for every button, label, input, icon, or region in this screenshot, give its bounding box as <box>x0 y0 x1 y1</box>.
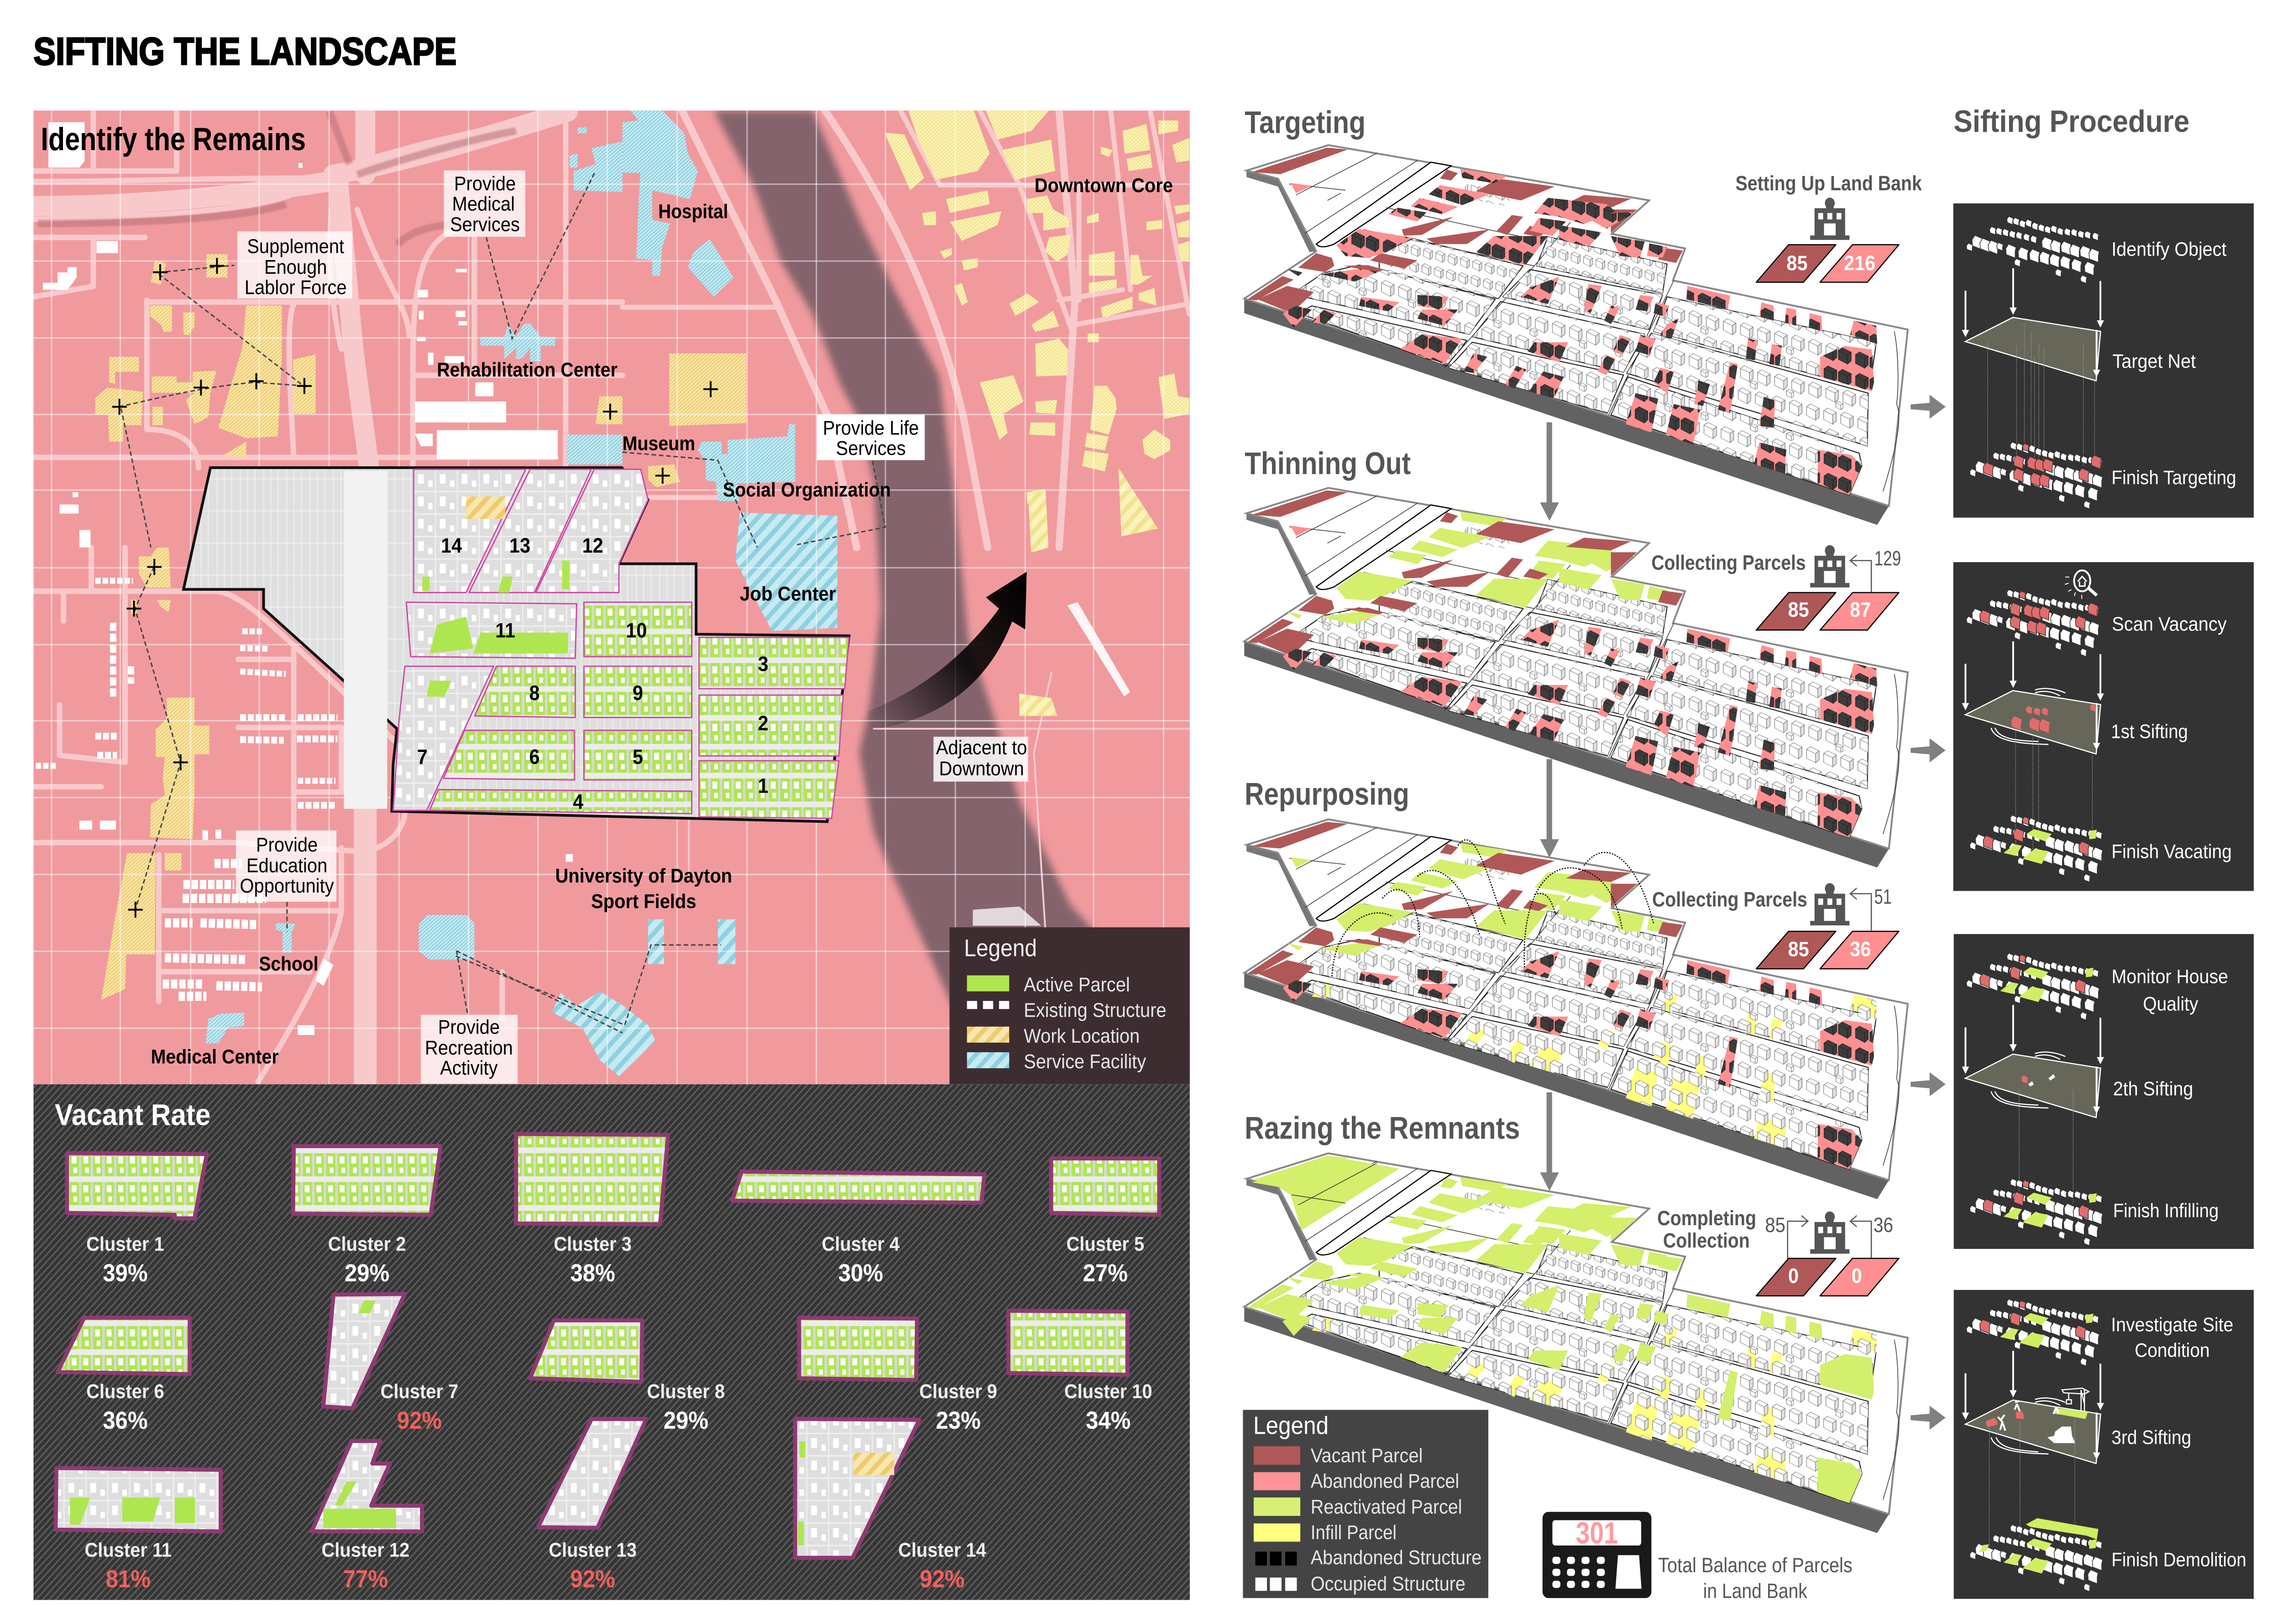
total balance caption: Total Balance of Parcels <box>1658 1554 1853 1577</box>
text box: medical services <box>444 170 525 237</box>
dotted relocation arcs <box>1332 840 1654 976</box>
cluster labels and vacancy rates: Cluster 2 <box>328 1232 406 1255</box>
legend: parcels <box>1243 1410 1488 1598</box>
step labels <box>2111 238 2236 488</box>
isometric map: targeting <box>1244 145 1908 525</box>
cluster labels and vacancy rates: Cluster 14 <box>898 1539 986 1561</box>
service facility buildings <box>480 127 623 465</box>
step diagram <box>1962 953 2104 1246</box>
icon: crane <box>2062 1388 2089 1411</box>
step labels: 3rd Sifting <box>2111 1426 2191 1448</box>
map legend: Service Facility <box>1024 1050 1146 1072</box>
cluster labels and vacancy rates: Cluster 6 <box>86 1380 164 1403</box>
map heading: Identify the Remains <box>41 121 306 157</box>
cluster labels and vacancy rates: 92% <box>570 1565 615 1593</box>
text box: supplement labor <box>237 231 352 298</box>
icons: workers and red structures <box>1985 1401 2058 1431</box>
collecting parcels label: Collecting Parcels <box>1651 552 1806 574</box>
parcel counts <box>1756 931 1899 969</box>
panel: procedure step 4 <box>1954 1290 2254 1599</box>
cluster numbers: 10 <box>626 619 647 642</box>
cluster labels and vacancy rates <box>85 1232 1152 1593</box>
step diagram <box>1962 216 2104 509</box>
transfer arrow and count <box>1850 885 1892 930</box>
heading: razing the remnants: Razing the Remnants <box>1245 1111 1520 1145</box>
text box: medical services: Services <box>450 213 520 235</box>
step labels: Quality <box>2143 993 2198 1015</box>
parcel counts: 0 <box>1788 1265 1799 1288</box>
transfer arrows and counts: 36 <box>1874 1214 1893 1237</box>
completing collection label: Collection <box>1663 1229 1750 1252</box>
parcel counts: 85 <box>1786 252 1808 275</box>
icon: land bank <box>1810 883 1849 925</box>
cluster numbers <box>417 534 769 814</box>
panel: procedure step 1 <box>1953 204 2254 517</box>
work location buildings <box>95 254 623 457</box>
step labels: Finish Vacating <box>2111 841 2232 862</box>
arrow: thinning to procedure <box>1910 738 1946 762</box>
cluster labels and vacancy rates: 92% <box>397 1406 442 1434</box>
text box: education <box>236 830 336 902</box>
cluster labels and vacancy rates: Cluster 3 <box>554 1232 632 1255</box>
parcel counts: 85 <box>1788 938 1809 961</box>
cluster labels and vacancy rates: 34% <box>1086 1406 1131 1434</box>
cluster blocks on the map <box>393 469 849 819</box>
text box: recreation <box>421 1015 518 1084</box>
map place labels <box>151 174 1173 1068</box>
cluster thumbnails <box>56 1134 1159 1558</box>
parcel counts <box>1756 1258 1899 1296</box>
text box: adjacent to downtown: Adjacent to <box>936 736 1027 759</box>
cluster labels and vacancy rates: 81% <box>106 1565 151 1593</box>
cluster labels and vacancy rates: Cluster 4 <box>822 1232 900 1255</box>
transfer arrow and count: 51 <box>1874 885 1892 909</box>
map legend <box>949 927 1190 1084</box>
parcel counts: 0 <box>1852 1265 1862 1288</box>
cluster labels and vacancy rates: Cluster 9 <box>919 1380 997 1403</box>
step diagram <box>1962 570 2104 882</box>
step labels: Identify Object <box>2111 238 2227 260</box>
cluster numbers: 6 <box>529 746 540 769</box>
panel: targeting <box>1244 105 1922 525</box>
icon: land bank calculator: 301 <box>1575 1516 1618 1550</box>
total balance caption: in Land Bank <box>1703 1580 1807 1603</box>
map grid lines <box>33 110 1190 1084</box>
map place labels: Sport Fields <box>591 890 696 913</box>
isometric map: thinning out <box>1244 488 1908 867</box>
map place labels: Museum <box>623 432 695 454</box>
heading: repurposing: Repurposing <box>1245 777 1409 811</box>
map place labels: Hospital <box>658 200 728 222</box>
cluster labels and vacancy rates: Cluster 8 <box>647 1380 725 1403</box>
step labels: Monitor House <box>2112 966 2228 987</box>
legend: parcels: Infill Parcel <box>1311 1521 1397 1543</box>
map legend: Active Parcel <box>1024 973 1130 996</box>
cluster numbers: 5 <box>633 746 643 769</box>
heading: targeting: Targeting <box>1245 105 1366 140</box>
text box: medical services: Provide <box>454 172 516 194</box>
panel: thinning out <box>1244 446 1908 867</box>
heading: thinning out: Thinning Out <box>1245 446 1411 481</box>
step labels <box>2111 1314 2246 1571</box>
map place labels: Rehabilitation Center <box>437 358 618 381</box>
legend: parcels: Vacant Parcel <box>1311 1444 1423 1467</box>
land bank label: Setting Up Land Bank <box>1735 172 1922 195</box>
text box: adjacent to downtown <box>933 736 1028 782</box>
green patches in sparse cluster thumbnails <box>70 1300 806 1546</box>
text box: supplement labor: Supplement <box>247 235 344 257</box>
cluster numbers: 11 <box>495 619 515 642</box>
cluster labels and vacancy rates: Cluster 1 <box>86 1232 164 1255</box>
map place labels: Job Center <box>740 582 836 605</box>
step labels: 2th Sifting <box>2113 1078 2193 1100</box>
map legend: Legend <box>964 934 1037 961</box>
text box: supplement labor: Lablor Force <box>245 276 347 298</box>
transfer arrows and counts <box>1765 1214 1893 1259</box>
highway through study area <box>344 471 387 809</box>
map place labels: Downtown Core <box>1035 174 1173 197</box>
legend: parcels: Abandoned Structure <box>1311 1546 1481 1568</box>
cluster labels and vacancy rates: Cluster 13 <box>549 1539 637 1561</box>
text box: life services: Provide Life <box>823 417 919 439</box>
icon: land bank <box>1810 545 1849 587</box>
step labels: Scan Vacancy <box>2112 613 2227 635</box>
map place labels: School <box>259 952 319 975</box>
map legend: Work Location <box>1024 1024 1140 1047</box>
parcel counts: 216 <box>1844 252 1875 275</box>
existing white structures <box>43 122 558 548</box>
cluster labels and vacancy rates: 92% <box>920 1565 965 1593</box>
cluster numbers: 7 <box>417 746 428 769</box>
cluster labels and vacancy rates: 30% <box>838 1259 883 1286</box>
map legend: Existing Structure <box>1024 999 1167 1021</box>
text box: education: Opportunity <box>240 874 334 897</box>
title: SIFTING THE LANDSCAPE <box>33 30 456 73</box>
completing collection label: Completing <box>1657 1207 1756 1230</box>
step labels: 1st Sifting <box>2111 721 2188 742</box>
cluster labels and vacancy rates: Cluster 11 <box>85 1539 172 1561</box>
heading: sifting procedure: Sifting Procedure <box>1953 104 2189 139</box>
total balance caption <box>1658 1554 1853 1603</box>
arrow: targeting to procedure <box>1910 395 1946 419</box>
text box: recreation: Activity <box>440 1056 498 1079</box>
text box: education: Education <box>246 854 327 877</box>
cluster numbers: 9 <box>633 682 643 705</box>
icon: bulldozer <box>2047 1426 2075 1443</box>
collecting parcels label: Collecting Parcels <box>1652 888 1807 911</box>
warehouse hatch in cluster 14 thumbnail <box>853 1452 894 1475</box>
step labels: Finish Infilling <box>2113 1200 2219 1222</box>
text box: medical services: Medical <box>452 193 515 215</box>
panel: razing the remnants <box>1244 1111 1908 1533</box>
arrow: repurposing to procedure <box>1910 1072 1946 1097</box>
cluster numbers: 14 <box>441 534 462 557</box>
cluster numbers: 12 <box>582 534 603 557</box>
arrow: targeting to thinning <box>1540 423 1559 521</box>
cluster labels and vacancy rates: Cluster 12 <box>322 1539 409 1561</box>
cluster labels and vacancy rates: Cluster 5 <box>1067 1232 1144 1255</box>
panel: identify the remains map <box>33 110 1209 1105</box>
arrow: thinning to repurposing <box>1540 759 1559 858</box>
cluster labels and vacancy rates: 29% <box>664 1406 708 1434</box>
icon: land bank calculator <box>1543 1512 1651 1598</box>
green parcels in sparse clusters <box>422 560 570 697</box>
cluster numbers: 1 <box>758 775 769 798</box>
step diagram <box>1962 1299 2104 1592</box>
cluster labels and vacancy rates: 38% <box>570 1259 615 1286</box>
cluster numbers: 4 <box>573 791 584 814</box>
parcel counts: 85 <box>1788 599 1809 621</box>
parcel counts: 87 <box>1850 599 1871 621</box>
isometric map: repurposing <box>1244 820 1908 1199</box>
step labels: Finish Demolition <box>2111 1549 2246 1571</box>
icon: land bank <box>1810 198 1849 240</box>
cluster numbers: 3 <box>758 653 769 676</box>
road network <box>34 110 1190 1082</box>
parcel counts <box>1756 593 1899 630</box>
legend: parcels: Occupied Structure <box>1311 1572 1466 1595</box>
text box: education: Provide <box>256 833 318 856</box>
cluster labels and vacancy rates: 77% <box>343 1565 388 1593</box>
step labels <box>2112 966 2228 1222</box>
cluster labels and vacancy rates: 36% <box>103 1406 148 1434</box>
heading: vacant rate: Vacant Rate <box>55 1098 210 1132</box>
cluster labels and vacancy rates: Cluster 7 <box>381 1380 458 1403</box>
cluster numbers: 13 <box>509 534 530 557</box>
map place labels: University of Dayton <box>555 864 732 887</box>
text box: life services <box>817 414 925 460</box>
step labels: Condition <box>2135 1339 2210 1361</box>
transfer arrow and count: 129 <box>1874 547 1901 570</box>
text box: life services: Services <box>836 437 906 459</box>
legend: parcels: Abandoned Parcel <box>1311 1470 1459 1492</box>
crosshair markers <box>112 258 718 918</box>
study area outline <box>183 468 849 822</box>
warehouse hatch in cluster 14 <box>466 496 505 519</box>
cluster numbers: 2 <box>758 712 769 735</box>
step labels: Investigate Site <box>2111 1314 2233 1336</box>
cluster labels and vacancy rates: 29% <box>345 1259 389 1286</box>
map place labels: Social Organization <box>723 478 891 501</box>
step labels <box>2111 613 2232 862</box>
icon: land bank <box>1810 1211 1849 1254</box>
cluster labels and vacancy rates: 27% <box>1083 1259 1128 1286</box>
step labels: Finish Targeting <box>2111 466 2236 488</box>
completing collection label <box>1657 1207 1756 1252</box>
road shadows <box>38 112 516 245</box>
transfer arrow and count <box>1850 547 1901 593</box>
panel: procedure step 3 <box>1954 934 2254 1249</box>
panel: repurposing <box>1244 777 1908 1199</box>
text box: recreation: Recreation <box>425 1036 513 1059</box>
panel: procedure step 2 <box>1953 562 2254 891</box>
cluster labels and vacancy rates: 39% <box>103 1259 148 1286</box>
isometric map: razing <box>1244 1153 1908 1533</box>
icon: magnifier over house <box>2065 570 2097 599</box>
river <box>713 110 1209 1105</box>
text box: adjacent to downtown: Downtown <box>939 757 1024 779</box>
parcel counts <box>1756 245 1899 282</box>
arrow: repurposing to razing <box>1540 1092 1559 1191</box>
parcel counts: 36 <box>1850 938 1871 961</box>
text box: recreation: Provide <box>438 1016 500 1038</box>
panel: vacant rate <box>33 1084 1190 1600</box>
dashed connections <box>119 171 885 1033</box>
cluster labels and vacancy rates: Cluster 10 <box>1064 1380 1152 1403</box>
transfer arrows and counts: 85 <box>1765 1214 1785 1237</box>
text box: supplement labor: Enough <box>264 256 327 278</box>
legend: parcels: Legend <box>1253 1412 1329 1440</box>
step labels: Target Net <box>2113 350 2196 372</box>
legend: parcels: Reactivated Parcel <box>1311 1495 1462 1518</box>
cluster labels and vacancy rates: 23% <box>936 1406 981 1434</box>
cluster numbers: 8 <box>529 682 540 705</box>
arrow: razing to procedure <box>1910 1406 1946 1430</box>
map place labels: Medical Center <box>151 1045 279 1068</box>
